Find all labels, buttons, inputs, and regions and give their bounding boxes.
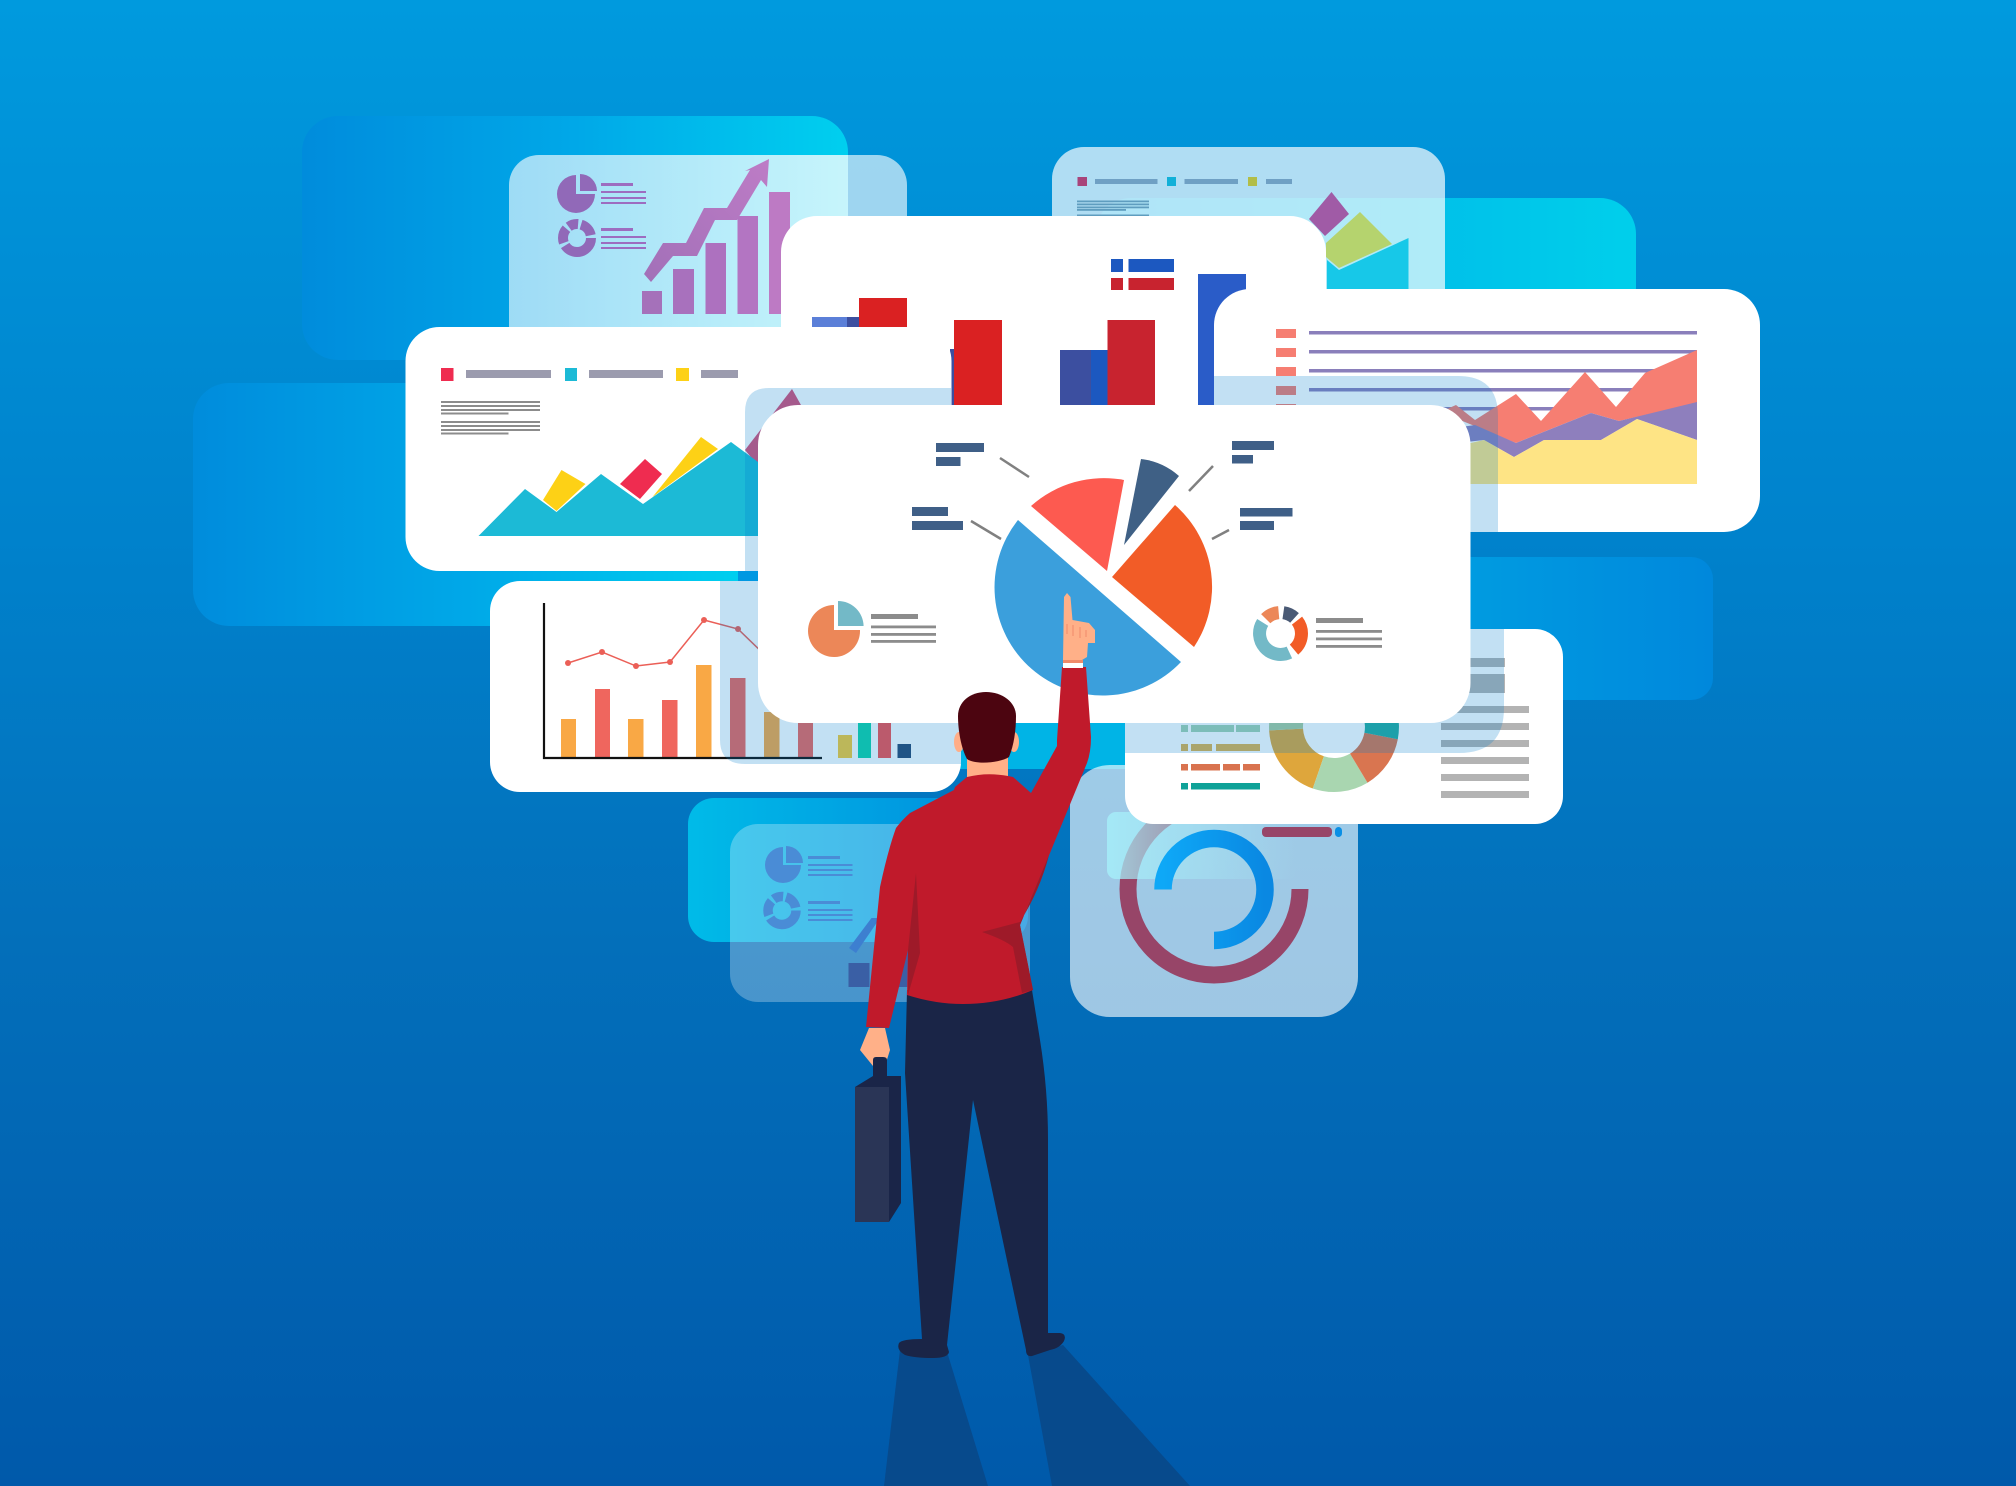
coral area [1440,350,1697,443]
panel: translucent ring card [1070,765,1358,1017]
panel: back cyan top right [1095,198,1636,378]
panel: faded legend area chart [1052,147,1445,387]
bar group 3 [1060,320,1155,405]
text lines [1077,200,1149,216]
bars [561,665,911,758]
pie slice: orange [1112,505,1212,647]
bar legend [1111,259,1174,290]
panel: purple growth chart [509,155,907,395]
text lines [441,401,540,434]
figure: businessman from behind [855,593,1095,1358]
panel: white line and bar chart [490,581,961,792]
raised pointing hand [1063,593,1095,660]
blue text lines [808,856,852,921]
icon: blue donut [768,896,796,924]
gray text lines [1441,658,1529,798]
pie slice: navy [1124,459,1179,545]
legend [441,368,738,381]
red diamond [620,459,662,499]
maroon shape [745,389,815,480]
blue ring [1163,839,1265,940]
arrow: growth [644,159,769,282]
icon: purple pie [557,174,597,213]
legend squares [1276,329,1296,413]
bar group 1 [812,298,907,329]
panel: back blue top left [302,116,848,360]
donut chart [1269,662,1399,792]
small donut [1260,613,1301,654]
yellow area [1440,419,1697,484]
translucent overlay [745,388,951,571]
panel: back blue strip [738,560,798,600]
jacket folds [908,855,1049,995]
legend [1078,177,1292,186]
blue dot [1335,827,1342,837]
small donut text lines [1316,618,1382,648]
cuff [1063,660,1083,668]
ears [954,732,1019,752]
purple bars [642,192,790,314]
panel: white donut card [1125,629,1563,824]
neck [967,750,1008,780]
legend rows [1181,725,1260,790]
panel: white multi-area chart [1214,289,1760,532]
icon: blue pie [765,846,803,883]
translucent overlay [720,581,961,764]
panel: main white pie chart [758,405,1470,723]
trousers [898,990,1065,1358]
purple area [1440,402,1697,457]
panel: white mountain area chart [406,327,952,571]
purple text lines [601,183,646,249]
panel: back cyan right [1000,557,1713,700]
icon: purple donut [563,224,591,252]
hair [958,692,1016,763]
briefcase [855,1057,901,1222]
lower hand [860,1028,890,1066]
panel: white bar chart [781,216,1326,426]
bar group 2 [950,320,1002,405]
line series [565,617,770,669]
pie slice: coral [1031,478,1124,571]
translucent overlay [1214,376,1498,532]
pie slice: blue [995,520,1181,696]
cyan mountain [478,442,800,536]
maroon label bar [1262,827,1332,837]
pie labels [912,441,1292,530]
leader lines [971,458,1229,539]
axes [544,603,822,758]
jacket [866,667,1091,1028]
panel: translucent lower pie card [730,824,1030,1002]
panel: back blue left [193,383,741,626]
tall blue bar [1198,274,1246,405]
yellow diamond [543,470,586,511]
translucent overlay [1125,629,1504,753]
maroon ring [1128,803,1300,975]
faded chart shapes [1309,192,1408,289]
small pie text lines [871,614,936,643]
shadows on floor [884,1345,1190,1486]
light inset [1107,812,1297,879]
small pie [808,601,864,657]
yellow sliver [652,437,718,497]
panel: back cyan centre [900,660,1200,769]
panel: back cyan lower [688,798,1028,942]
horizontal lines [1309,331,1697,410]
faded arrow and bars [848,918,920,987]
